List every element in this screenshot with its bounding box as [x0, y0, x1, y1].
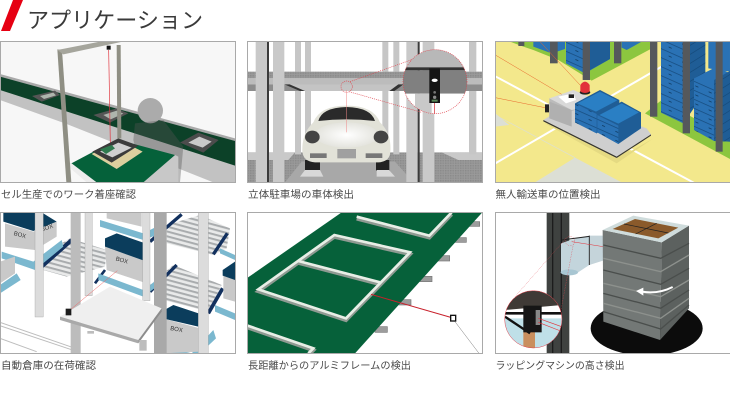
caption: 長距離からのアルミフレームの検出 [248, 359, 411, 372]
aluminium posts [35, 212, 208, 353]
panel: wrapping machine [504, 213, 703, 353]
column [547, 212, 569, 353]
floor rails [0, 322, 73, 352]
poles [518, 42, 723, 152]
panel border [496, 42, 730, 182]
laser lines [495, 42, 580, 108]
frame with sensor beam [57, 42, 123, 182]
green belt [248, 212, 482, 353]
panel border [248, 212, 482, 354]
panel: cell production [0, 42, 235, 182]
BOX cartons [0, 212, 235, 353]
aluminium frames [248, 212, 452, 355]
laser beam [371, 294, 452, 318]
caption: 自動倉庫の在荷確認 [1, 359, 97, 372]
trays on conveyor [32, 91, 219, 153]
dotted leader lines [340, 59, 422, 112]
BOX cartons: BOX [13, 231, 27, 240]
caption: 立体駐車場の車体検出 [248, 188, 354, 201]
turntable [591, 301, 703, 356]
front columns [256, 42, 434, 182]
sensor beam [346, 90, 347, 132]
floor patches and lines [495, 67, 695, 183]
upper deck [248, 72, 482, 91]
sensor and cable [451, 315, 479, 353]
teal shelf rails [0, 220, 235, 353]
inset magnified sensor [503, 291, 563, 348]
roller racks [42, 214, 230, 313]
magnified sensor [402, 48, 468, 117]
rotation arrow [636, 287, 673, 296]
caption: 無人輸送車の位置検出 [496, 188, 600, 201]
operator silhouette [133, 98, 183, 182]
caption: ラッピングマシンの高さ検出 [496, 359, 624, 372]
film roll [561, 236, 605, 275]
BOX cartons: BOX [115, 256, 129, 266]
title [1, 0, 203, 33]
panel border [0, 42, 236, 182]
conveyor [0, 74, 235, 182]
BOX cartons: BOX [40, 224, 54, 234]
workpiece on table [92, 138, 143, 169]
caption: セル生産でのワーク着座確認 [1, 188, 137, 201]
blue racks [533, 42, 730, 142]
sensor table [60, 287, 162, 351]
rollers [375, 222, 480, 332]
blue crates [575, 90, 641, 144]
panel border [0, 212, 236, 354]
panel border [496, 212, 730, 354]
panel: parking [248, 42, 482, 182]
green rack bases [510, 42, 730, 159]
panel border [248, 42, 482, 182]
AGV body [543, 90, 653, 163]
dotted leaders [515, 236, 575, 315]
lower floor [248, 152, 482, 182]
panel: AGV [495, 42, 730, 183]
BOX cartons: BOX [170, 326, 183, 334]
rear columns [295, 42, 476, 154]
panel: aluminium frame [248, 212, 482, 355]
wrapped load [603, 216, 689, 340]
sensor and beam [66, 271, 117, 315]
car [300, 106, 395, 177]
red beacon [580, 82, 590, 95]
table [67, 139, 178, 182]
heading text: アプリケーション [27, 8, 203, 33]
icon: red slash [1, 0, 23, 31]
panel: automated warehouse [0, 212, 235, 353]
